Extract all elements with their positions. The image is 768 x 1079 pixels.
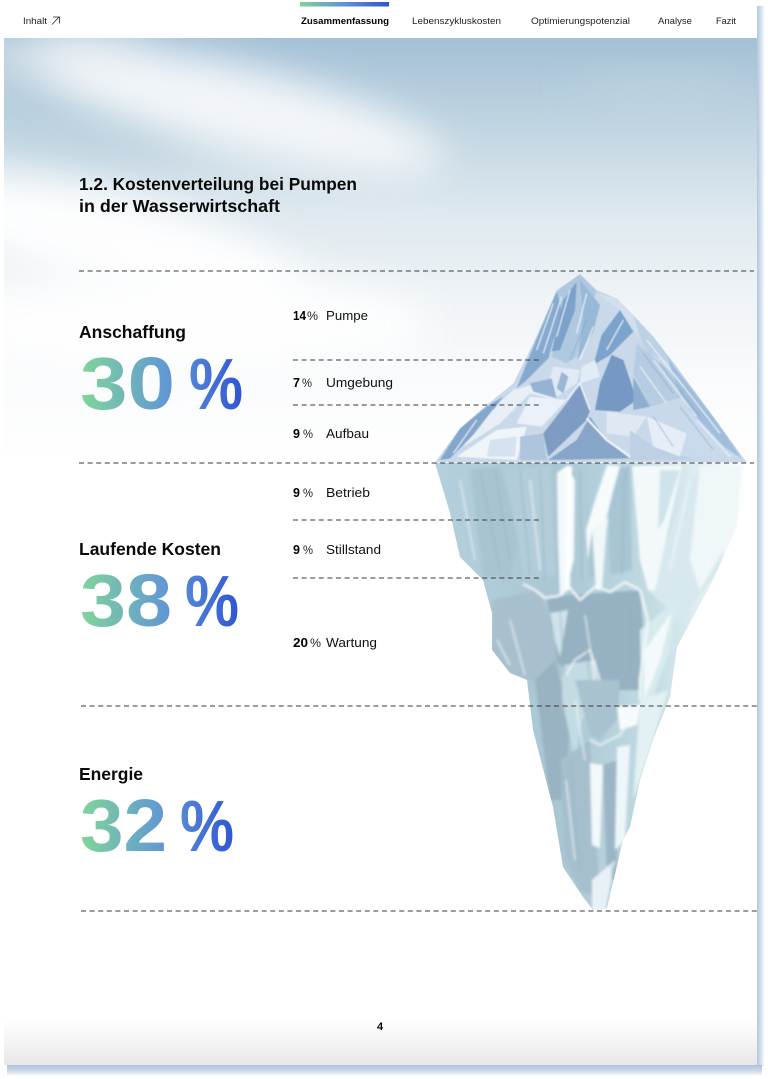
nav: sections: Fazit: [716, 16, 736, 27]
dashed dividers: [79, 271, 757, 911]
nav: sections: Lebenszykluskosten: [412, 16, 501, 27]
section: Energie: [79, 764, 234, 867]
section: Anschaffung: [79, 322, 243, 425]
iceberg: [435, 274, 746, 910]
section: Anschaffung: %: [189, 345, 243, 425]
nav: sections: [301, 16, 736, 27]
iceberg: tip above water: [435, 274, 746, 462]
item: Wartung: Wartung: [326, 636, 377, 650]
section: Anschaffung: 30: [80, 342, 175, 425]
section: Energie: %: [180, 787, 234, 867]
header bar: [4, 0, 757, 38]
nav: sections: Analyse: [658, 16, 692, 27]
item: Aufbau: Aufbau: [326, 427, 369, 441]
title: [79, 174, 357, 216]
nav: sections: Zusammenfassung: [301, 16, 389, 27]
nav: contents link: [23, 16, 60, 27]
item: Wartung: 20: [293, 636, 308, 650]
section: Laufende Kosten: %: [185, 562, 239, 642]
item: Pumpe: %: [307, 309, 318, 323]
footer fade: [4, 1020, 757, 1065]
nav: sections: Optimierungspotenzial: [531, 16, 630, 27]
item: Wartung: [293, 636, 377, 650]
item: Betrieb: [293, 486, 370, 500]
section: Energie: 32: [80, 784, 167, 867]
item: Stillstand: %: [303, 543, 313, 557]
section: Energie: Energie: [79, 764, 143, 784]
section: Laufende Kosten: [79, 539, 239, 642]
item: Umgebung: [293, 376, 393, 390]
item: Umgebung: 7: [293, 376, 300, 390]
item: Pumpe: [293, 309, 368, 323]
item: Betrieb: Betrieb: [326, 486, 370, 500]
item: Stillstand: [293, 543, 381, 557]
item: Betrieb: 9: [293, 486, 300, 500]
item: Aufbau: %: [303, 427, 313, 441]
item: Aufbau: 9: [293, 427, 300, 441]
nav: active indicator: [300, 2, 389, 6]
section: Laufende Kosten: 38: [80, 559, 172, 642]
section: Anschaffung: Anschaffung: [79, 322, 186, 342]
iceberg: body under water: [430, 460, 750, 915]
item: Umgebung: %: [302, 376, 312, 390]
item: Umgebung: Umgebung: [326, 376, 393, 390]
item: Wartung: %: [310, 636, 321, 650]
item: Pumpe: 14: [293, 309, 306, 323]
section: Laufende Kosten: Laufende Kosten: [79, 539, 221, 559]
title: in der Wasserwirtschaft: [79, 196, 280, 216]
title: 1.2. Kostenverteilung bei Pumpen: [79, 174, 357, 194]
nav: contents link: Inhalt: [23, 16, 47, 27]
sky background: [4, 38, 757, 362]
item: Stillstand: 9: [293, 543, 300, 557]
page number: 4: [377, 1021, 384, 1033]
item: Stillstand: Stillstand: [326, 543, 381, 557]
item: Aufbau: [293, 427, 369, 441]
item: Pumpe: Pumpe: [326, 309, 368, 323]
item: Betrieb: %: [303, 486, 313, 500]
